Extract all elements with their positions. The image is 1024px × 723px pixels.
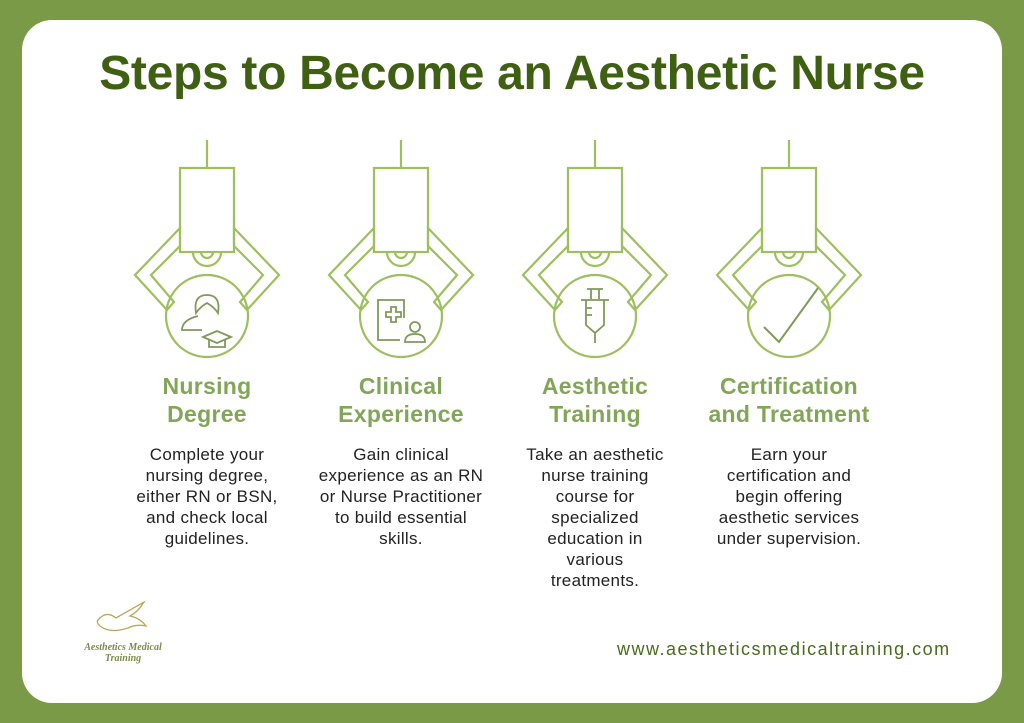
logo	[84, 600, 162, 664]
icon: nursing degree	[135, 140, 279, 357]
step 2: or Nurse Practitioner	[320, 487, 482, 506]
step 3: various	[567, 550, 623, 569]
step 2	[319, 373, 483, 548]
step 4	[708, 373, 870, 548]
step 3	[526, 373, 664, 590]
logo: Training	[105, 653, 141, 664]
step 2: experience as an RN	[319, 466, 483, 485]
step 2: Experience	[338, 401, 464, 427]
step 2: skills.	[379, 529, 423, 548]
step 3: treatments.	[551, 571, 639, 590]
icon: aesthetic training	[523, 140, 667, 357]
step 3: Take an aesthetic	[526, 445, 664, 464]
icon: clinical experience	[329, 140, 473, 357]
step 3: specialized	[551, 508, 639, 527]
step 1: Degree	[167, 401, 247, 427]
step 3: Aesthetic	[542, 373, 648, 399]
step 4: aesthetic services	[719, 508, 859, 527]
step 2: Gain clinical	[353, 445, 449, 464]
step 4: certification and	[727, 466, 851, 485]
website url: www.aestheticsmedicaltraining.com	[617, 639, 951, 659]
step 3: education in	[547, 529, 643, 548]
title: Steps to Become an Aesthetic Nurse	[99, 47, 925, 100]
step 1: Complete your	[150, 445, 264, 464]
step 1: Nursing	[162, 373, 252, 399]
step 1: nursing degree,	[146, 466, 268, 485]
step 1: guidelines.	[165, 529, 249, 548]
step 4: under supervision.	[717, 529, 861, 548]
step 2: Clinical	[359, 373, 443, 399]
step 4: begin offering	[736, 487, 842, 506]
step 3: course for	[556, 487, 634, 506]
step 4: Certification	[720, 373, 858, 399]
step 3: nurse training	[541, 466, 649, 485]
step 1	[136, 373, 278, 548]
logo: Aesthetics Medical	[84, 642, 162, 653]
step 1: and check local	[146, 508, 268, 527]
step 3: Training	[549, 401, 641, 427]
step 4: Earn your	[751, 445, 827, 464]
step 1: either RN or BSN,	[136, 487, 278, 506]
step 4: and Treatment	[708, 401, 870, 427]
icon: certification	[717, 140, 861, 357]
step 2: to build essential	[335, 508, 467, 527]
